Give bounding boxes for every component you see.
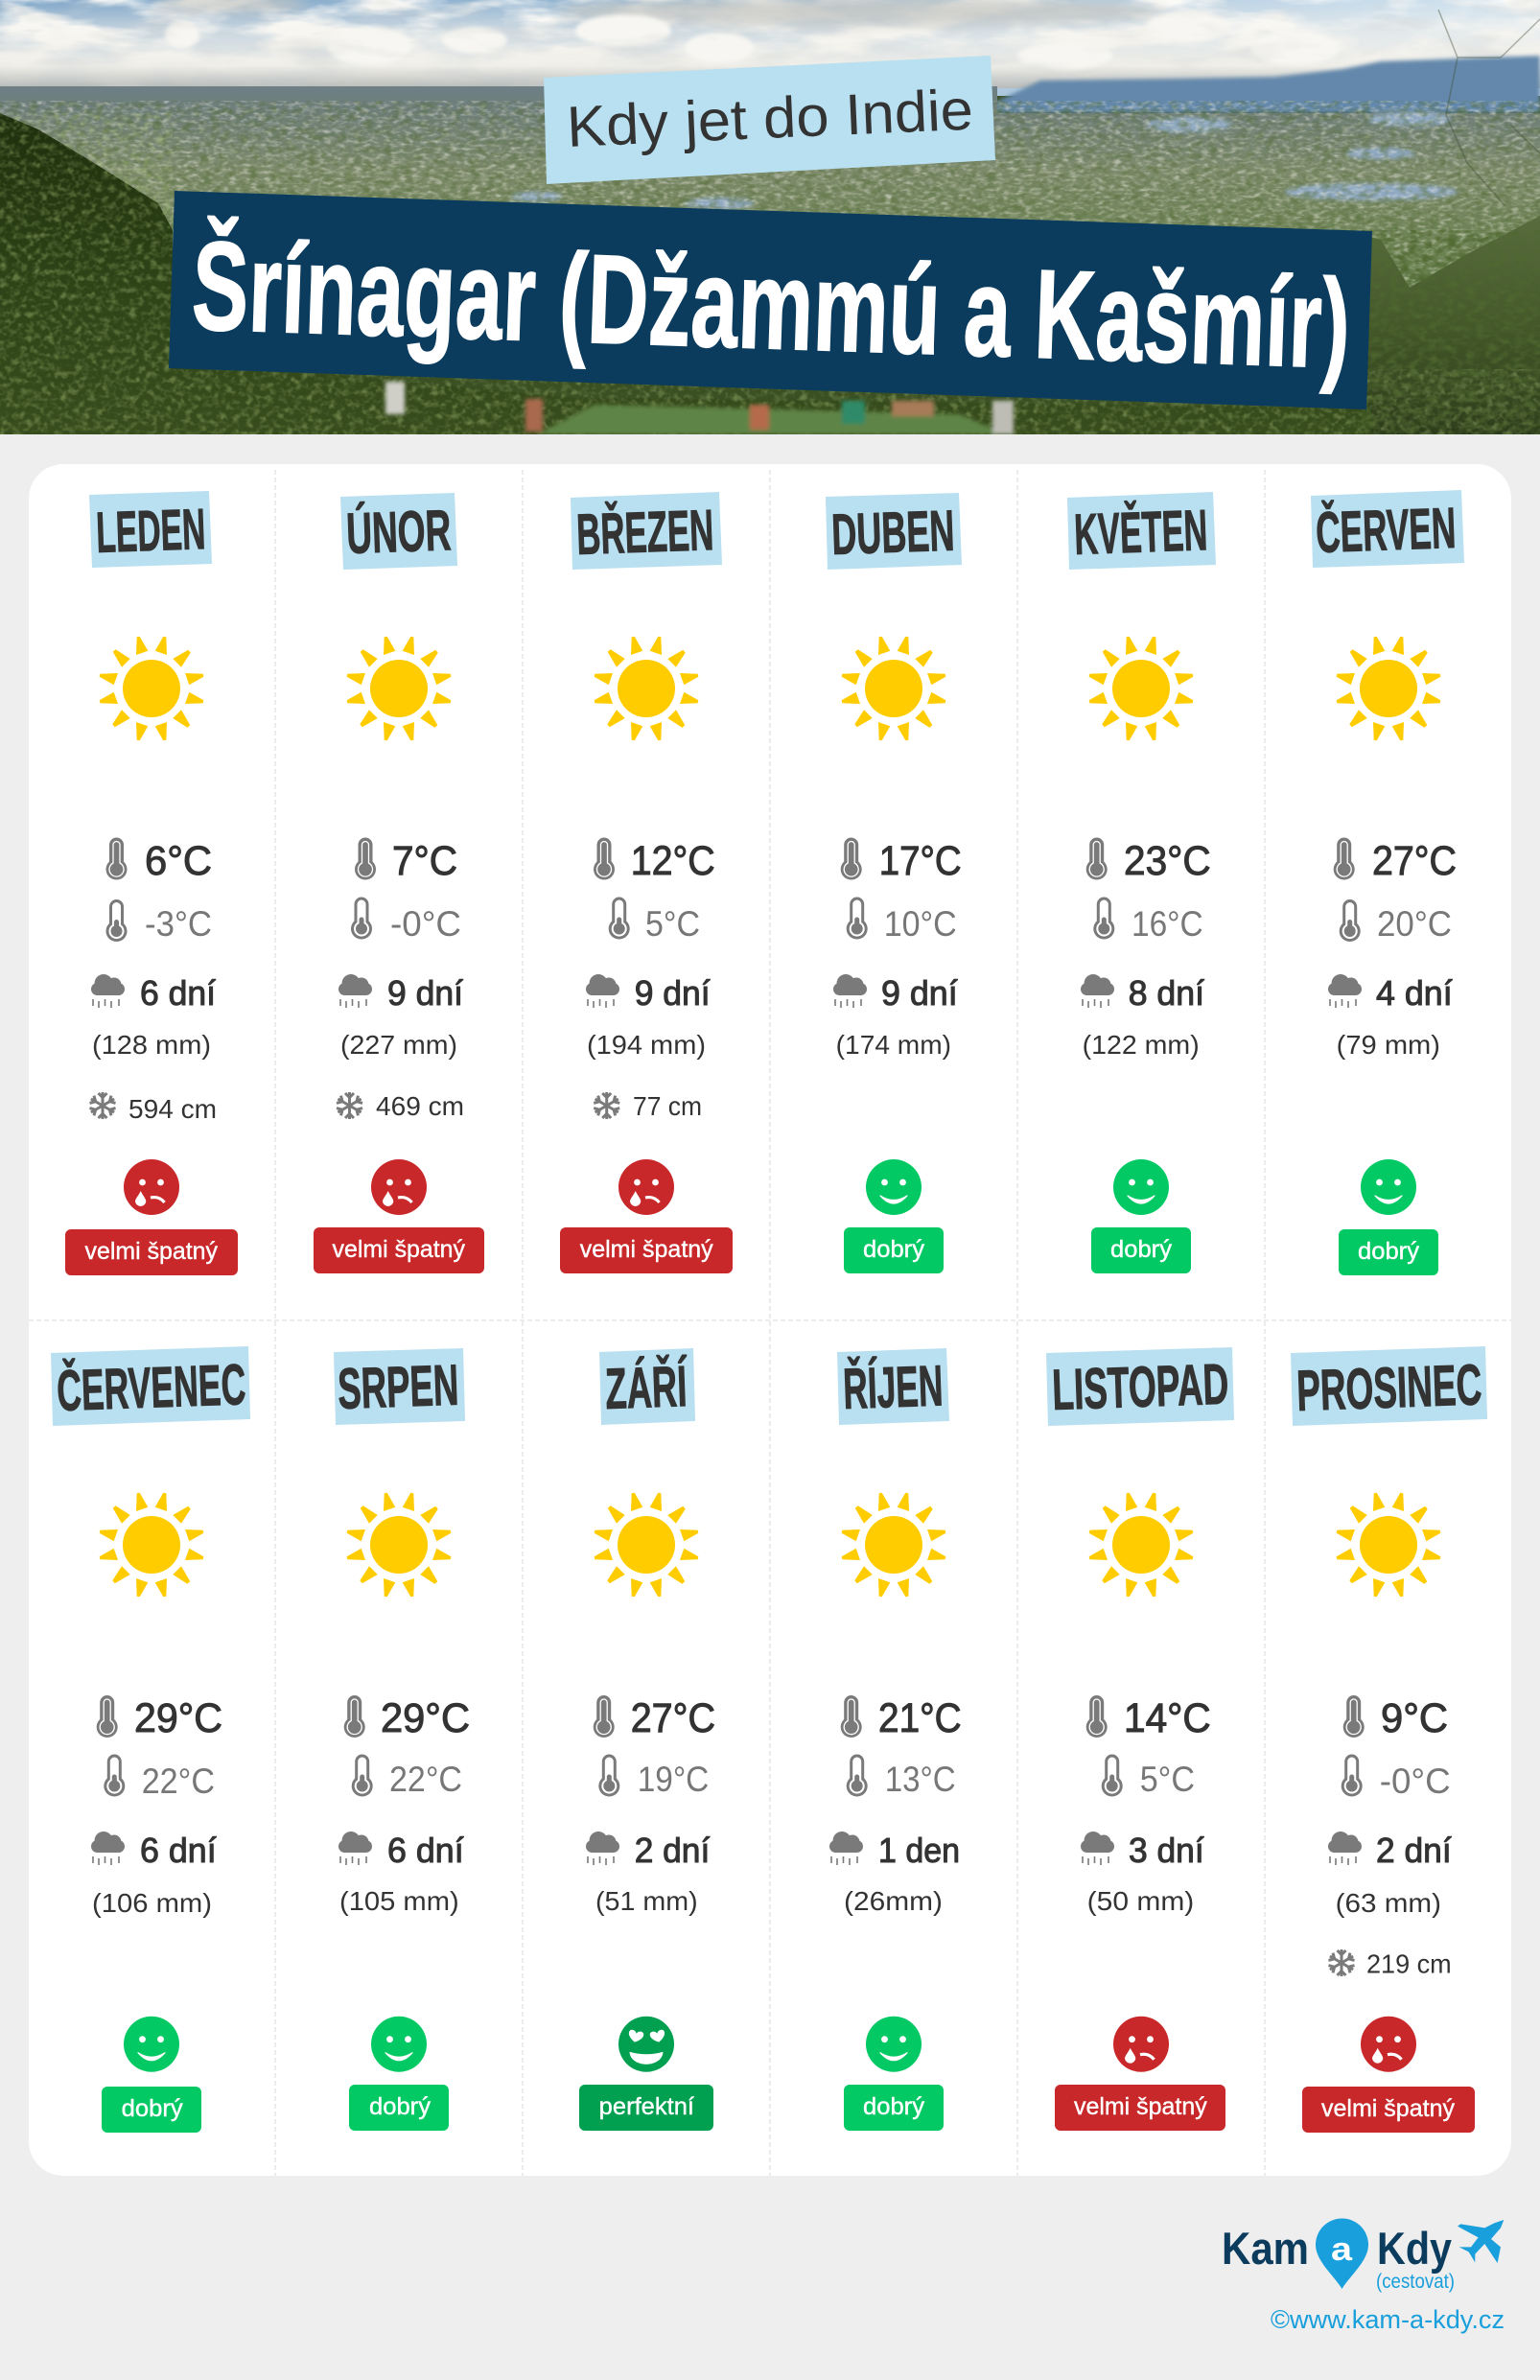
heading: Červenec xyxy=(51,1346,250,1426)
rating badge xyxy=(65,1229,238,1275)
rating badge: velmi špatný xyxy=(332,1236,465,1263)
icon: rain cloud xyxy=(1081,974,1114,1008)
heading: Březen xyxy=(571,492,722,570)
max temperature: 27°C xyxy=(631,1695,715,1741)
icon: thermometer max xyxy=(344,1695,365,1738)
icon: sun xyxy=(100,637,203,740)
min temperature: 13°C xyxy=(885,1760,956,1799)
icon: rain cloud xyxy=(833,974,867,1008)
icon: thermometer max xyxy=(1343,1695,1365,1738)
icon: sun xyxy=(595,637,698,740)
heading: Srpen: SRPEN xyxy=(337,1353,459,1421)
panel: Listopad xyxy=(1046,1347,1234,2131)
icon: smiling face xyxy=(124,2017,179,2072)
rainfall: (122 mm) xyxy=(1083,1030,1200,1060)
icon: snowflake xyxy=(89,1092,116,1119)
panel: Březen xyxy=(560,492,733,1273)
heading: Říjen xyxy=(837,1348,949,1425)
icon: smiling face xyxy=(1361,1159,1416,1215)
heading: Leden: LEDEN xyxy=(95,497,206,565)
min temperature: -0°C xyxy=(1380,1762,1451,1801)
rating badge: velmi špatný xyxy=(84,1238,218,1265)
rainy days: 1 den xyxy=(878,1831,960,1870)
heading: Říjen: ŘÍJEN xyxy=(842,1353,944,1421)
rating badge: dobrý xyxy=(369,2093,432,2120)
rating badge xyxy=(560,1227,733,1273)
rating badge xyxy=(1091,1227,1191,1273)
subtitle tag xyxy=(544,56,995,184)
icon: snowflake xyxy=(336,1092,363,1119)
max temperature: 12°C xyxy=(631,838,715,884)
icon: snowflake xyxy=(1328,1949,1355,1976)
icon: thermometer min xyxy=(847,898,868,940)
snowfall: 594 cm xyxy=(128,1094,217,1124)
heading: Květen: KVĚTEN xyxy=(1073,498,1208,567)
panel: Září xyxy=(579,1348,715,2131)
forest left, right and bottom xyxy=(1367,216,1540,434)
heading: Květen xyxy=(1067,492,1216,570)
hero photo: Srinagar landscape xyxy=(0,0,1540,434)
snowfall: 469 cm xyxy=(376,1091,464,1121)
logo word: Kdy: Kdy xyxy=(1377,2223,1452,2274)
icon: thermometer min xyxy=(847,1755,868,1797)
icon: thermometer max xyxy=(1086,1695,1108,1738)
min temperature: 10°C xyxy=(884,904,957,944)
icon: rain cloud xyxy=(1328,1832,1362,1865)
icon: crying face xyxy=(124,1159,179,1215)
icon: sun xyxy=(1089,637,1193,740)
rainy days: 9 dní xyxy=(387,973,463,1013)
icon: sun xyxy=(347,1493,451,1597)
max temperature: 7°C xyxy=(392,838,457,884)
rainfall: (51 mm) xyxy=(595,1886,698,1916)
rating badge xyxy=(349,2085,449,2131)
icon: sun xyxy=(347,637,451,740)
icon: crying face xyxy=(1361,2017,1416,2072)
logo tagline: (cestovat) xyxy=(1376,2271,1455,2293)
icon: crying face xyxy=(1113,2017,1169,2072)
icon: sun xyxy=(1337,1493,1440,1597)
icon: thermometer min xyxy=(104,1755,125,1797)
icon: thermometer min xyxy=(351,898,372,940)
max temperature: 14°C xyxy=(1124,1695,1211,1741)
icon: smiling face xyxy=(866,1159,922,1215)
min temperature: 5°C xyxy=(645,904,700,944)
icon: rain cloud xyxy=(91,1832,125,1865)
mountains xyxy=(992,56,1540,113)
icon: snowflake xyxy=(593,1092,620,1119)
rating badge xyxy=(314,1227,484,1273)
icon: smiling face xyxy=(371,2017,427,2072)
panel: Prosinec xyxy=(1291,1346,1487,2133)
panel: Únor xyxy=(314,493,484,1273)
rating badge: dobrý xyxy=(1358,1238,1420,1265)
rainfall: (63 mm) xyxy=(1336,1888,1441,1918)
rating badge: velmi špatný xyxy=(1321,2095,1455,2122)
max temperature: 21°C xyxy=(878,1695,962,1741)
rating badge xyxy=(844,2085,944,2131)
rainy days: 2 dní xyxy=(1376,1831,1452,1870)
max temperature: 6°C xyxy=(145,838,212,884)
icon: sun xyxy=(842,637,945,740)
heading: Listopad: LISTOPAD xyxy=(1051,1352,1229,1422)
heading: Září: ZÁŘÍ xyxy=(604,1354,688,1421)
icon: rain cloud xyxy=(1081,1832,1114,1865)
min temperature: 5°C xyxy=(1140,1760,1195,1799)
rainfall: (227 mm) xyxy=(340,1030,457,1060)
rating badge xyxy=(1339,1229,1438,1275)
heading: Únor xyxy=(340,493,457,570)
panel: Říjen xyxy=(829,1348,962,2131)
icon: thermometer max xyxy=(105,838,127,880)
rainfall: (128 mm) xyxy=(92,1030,211,1060)
bottom valley with buildings xyxy=(385,382,1014,434)
max temperature: 29°C xyxy=(134,1695,222,1741)
icon: smiling face xyxy=(1113,1159,1169,1215)
icon: crying face xyxy=(371,1159,427,1215)
rainy days: 9 dní xyxy=(635,973,711,1013)
max temperature: 27°C xyxy=(1372,838,1457,884)
icon: thermometer max xyxy=(594,1695,615,1738)
rainy days: 3 dní xyxy=(1129,1831,1204,1870)
rainfall: (79 mm) xyxy=(1337,1030,1440,1060)
max temperature: 9°C xyxy=(1381,1695,1448,1741)
heading: Únor: ÚNOR xyxy=(345,498,452,566)
icon: sun xyxy=(842,1493,945,1597)
rating badge: perfektní xyxy=(599,2093,694,2120)
rainy days: 2 dní xyxy=(635,1831,710,1870)
rainfall: (194 mm) xyxy=(587,1030,706,1060)
panel: Červen xyxy=(1311,490,1464,1275)
min temperature: -3°C xyxy=(145,904,212,944)
icon: face with heart eyes xyxy=(618,2017,674,2072)
panel: Srpen xyxy=(334,1348,470,2131)
icon: thermometer max xyxy=(355,838,376,880)
rainfall: (174 mm) xyxy=(836,1030,951,1060)
heading: Listopad xyxy=(1046,1347,1234,1426)
icon: rain cloud xyxy=(338,974,372,1008)
icon: thermometer max xyxy=(1334,838,1355,880)
panel: Červenec xyxy=(51,1346,250,2133)
icon: rain cloud xyxy=(829,1832,863,1865)
rating badge xyxy=(102,2087,201,2133)
icon: thermometer min xyxy=(1102,1755,1123,1797)
icon: thermometer max xyxy=(841,838,862,880)
min temperature: -0°C xyxy=(390,904,461,944)
subtitle tag: Kdy jet do Indie xyxy=(566,78,974,159)
icon: airplane xyxy=(1458,2220,1504,2263)
icon: sun xyxy=(595,1493,698,1597)
max temperature: 23°C xyxy=(1124,838,1211,884)
website credit: ©www.kam-a-kdy.cz xyxy=(1271,2305,1505,2334)
icon: map pin: a xyxy=(1331,2231,1353,2268)
max temperature: 29°C xyxy=(381,1695,470,1741)
heading: Červen xyxy=(1311,490,1464,568)
icon: rain cloud xyxy=(586,974,619,1008)
rating badge: dobrý xyxy=(863,2093,925,2120)
rating badge xyxy=(1302,2087,1475,2133)
panel: Leden xyxy=(65,491,238,1275)
panel: monthly climate grid xyxy=(29,464,1511,2176)
min temperature: 20°C xyxy=(1377,904,1452,944)
rainfall: (105 mm) xyxy=(339,1886,459,1916)
rainy days: 8 dní xyxy=(1129,973,1204,1013)
icon: map pin xyxy=(1316,2219,1368,2289)
rainy days: 4 dní xyxy=(1376,973,1453,1013)
logo word: Kam: Kam xyxy=(1222,2223,1309,2274)
icon: thermometer min xyxy=(1093,898,1114,940)
snowfall: 219 cm xyxy=(1366,1949,1452,1979)
rainy days: 6 dní xyxy=(387,1831,464,1870)
heading: Září xyxy=(599,1348,695,1425)
icon: rain cloud xyxy=(338,1832,372,1865)
icon: crying face xyxy=(618,1159,674,1215)
rating badge xyxy=(579,2085,713,2131)
icon: thermometer max xyxy=(1086,838,1108,880)
min temperature: 22°C xyxy=(389,1760,462,1799)
icon: thermometer min xyxy=(105,899,127,942)
rating badge: velmi špatný xyxy=(580,1236,713,1263)
panel: Květen xyxy=(1067,492,1216,1273)
rainfall: (26mm) xyxy=(844,1886,943,1916)
icon: thermometer max xyxy=(97,1695,118,1738)
min temperature: 16°C xyxy=(1132,904,1203,944)
icon: thermometer min xyxy=(352,1755,373,1797)
icon: thermometer min xyxy=(1340,899,1361,942)
icon: thermometer min xyxy=(598,1755,619,1797)
icon: smiling face xyxy=(866,2017,922,2072)
icon: sun xyxy=(100,1493,203,1597)
icon: sun xyxy=(1089,1493,1193,1597)
rating badge xyxy=(1055,2085,1225,2131)
rainfall: (50 mm) xyxy=(1087,1886,1194,1916)
min temperature: 22°C xyxy=(142,1762,215,1801)
snowfall: 77 cm xyxy=(633,1091,702,1121)
rating badge xyxy=(844,1227,944,1273)
icon: rain cloud xyxy=(1328,974,1362,1008)
heading: Březen: BŘEZEN xyxy=(575,498,714,567)
icon: thermometer min xyxy=(1342,1755,1363,1797)
icon: rain cloud xyxy=(586,1832,619,1865)
heading: Duben xyxy=(826,493,962,570)
icon: thermometer max xyxy=(594,838,615,880)
rainy days: 9 dní xyxy=(881,973,958,1013)
icon: thermometer max xyxy=(841,1695,862,1738)
rating badge: dobrý xyxy=(863,1236,925,1263)
heading: Srpen xyxy=(334,1348,465,1425)
rainfall: (106 mm) xyxy=(92,1888,212,1918)
rainy days: 6 dní xyxy=(140,1831,217,1870)
heading: Červenec: ČERVENEC xyxy=(56,1352,246,1423)
heading: Leden xyxy=(89,491,212,568)
heading: Duben: DUBEN xyxy=(830,499,955,567)
rating badge: dobrý xyxy=(122,2095,183,2122)
rating badge: dobrý xyxy=(1110,1236,1173,1263)
icon: sun xyxy=(1337,637,1440,740)
max temperature: 17°C xyxy=(879,838,962,884)
panel: Duben xyxy=(826,493,962,1273)
icon: thermometer min xyxy=(609,898,630,940)
rating badge: velmi špatný xyxy=(1074,2093,1207,2120)
icon: rain cloud xyxy=(91,974,125,1008)
min temperature: 19°C xyxy=(638,1760,709,1799)
rainy days: 6 dní xyxy=(140,973,216,1013)
logo: Kam a Kdy xyxy=(1222,2219,1505,2334)
